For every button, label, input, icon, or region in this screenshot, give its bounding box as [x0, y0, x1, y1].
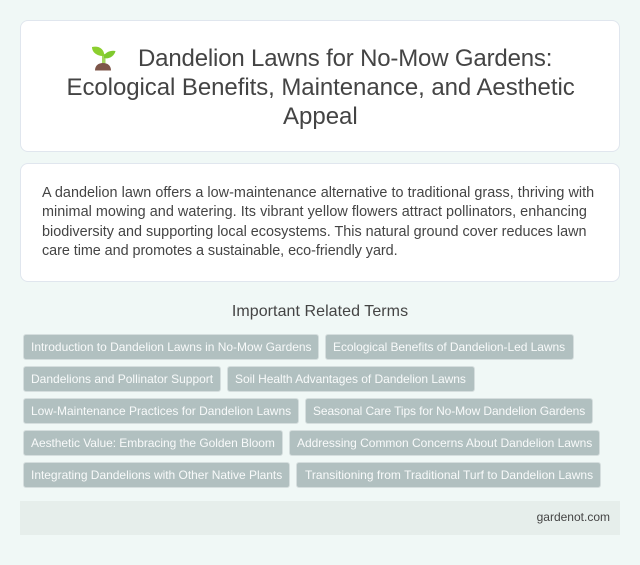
tag — [23, 430, 283, 456]
related terms tags — [23, 334, 601, 488]
tag: Aesthetic Value: Embracing the Golden Bloom — [31, 436, 275, 450]
footer bar — [20, 501, 620, 535]
tag: Addressing Common Concerns About Dandelion Lawns — [297, 436, 592, 450]
tag — [325, 334, 574, 360]
tag — [296, 462, 601, 488]
heading — [66, 45, 575, 130]
tag — [23, 462, 290, 488]
intro paragraph: A dandelion lawn offers a low-maintenance alternative to traditional grass, thriving with — [42, 185, 594, 201]
tag — [289, 430, 600, 456]
intro text panel — [20, 163, 620, 282]
section heading: Important Related Terms — [232, 303, 408, 320]
tag — [227, 366, 475, 392]
intro paragraph: care time and promotes a sustainable, eco-friendly yard. — [42, 243, 398, 259]
heading: Ecological Benefits, Maintenance, and Aesthetic — [66, 74, 575, 101]
tag — [23, 334, 319, 360]
intro paragraph: minimal mowing and watering. Its vibrant yellow flowers attract pollinators, enhancing — [42, 204, 587, 220]
tag — [305, 398, 593, 424]
footer source text: gardenot.com — [537, 510, 610, 524]
tag: Ecological Benefits of Dandelion-Led Lawns — [333, 340, 565, 354]
tag: Introduction to Dandelion Lawns in No-Mow Gardens — [31, 340, 312, 354]
tag: Transitioning from Traditional Turf to Dandelion Lawns — [305, 468, 593, 482]
intro paragraph — [42, 185, 594, 259]
heading: Appeal — [283, 103, 358, 130]
tag — [23, 398, 299, 424]
tag — [23, 366, 221, 392]
intro paragraph: biodiversity and supporting local ecosystems. This natural ground cover reduces lawn — [42, 224, 586, 240]
icon: seedling — [92, 46, 116, 70]
tag: Seasonal Care Tips for No-Mow Dandelion Gardens — [313, 404, 585, 418]
tag: Soil Health Advantages of Dandelion Lawns — [235, 372, 466, 386]
tag: Low-Maintenance Practices for Dandelion Lawns — [31, 404, 291, 418]
tag: Dandelions and Pollinator Support — [31, 372, 213, 386]
title panel — [20, 20, 620, 152]
heading: Dandelion Lawns for No-Mow Gardens: — [138, 45, 552, 72]
tag: Integrating Dandelions with Other Native Plants — [31, 468, 282, 482]
